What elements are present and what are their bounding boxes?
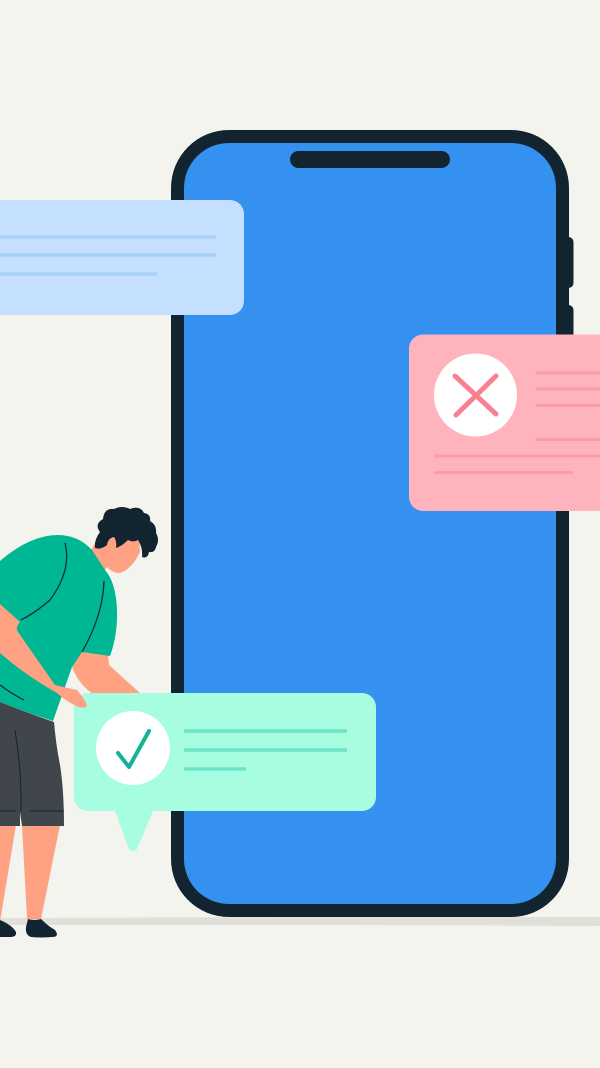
near arm and hand bbox=[0, 604, 87, 708]
legs bbox=[0, 825, 60, 922]
shorts fold lines bbox=[0, 730, 64, 812]
shoes bbox=[0, 919, 57, 938]
hair bbox=[95, 507, 158, 557]
ground shadow bbox=[0, 917, 600, 926]
blue message card bbox=[0, 200, 244, 315]
pink error card bbox=[409, 334, 600, 511]
person bbox=[0, 507, 158, 938]
shorts bbox=[0, 702, 64, 826]
green success card bbox=[74, 693, 376, 852]
neck and face bbox=[91, 530, 140, 573]
shirt fold lines bbox=[0, 543, 104, 700]
far arm bbox=[72, 650, 141, 698]
shirt bbox=[0, 535, 117, 721]
phone bbox=[171, 130, 574, 917]
